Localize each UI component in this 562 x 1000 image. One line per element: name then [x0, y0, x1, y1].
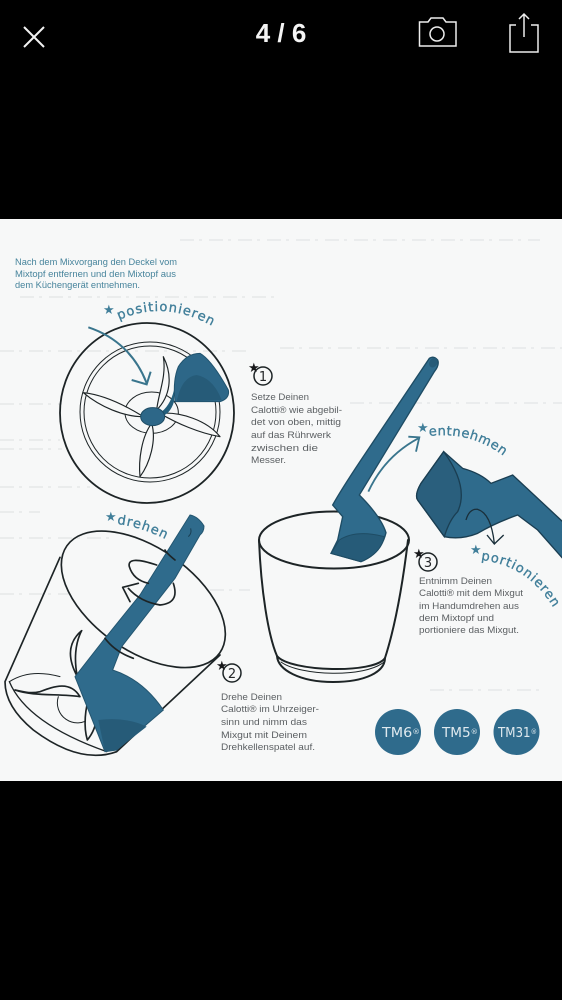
- spatula from above: [141, 353, 229, 426]
- step 2 badge: [216, 659, 241, 682]
- arrow: entnehmen: [368, 437, 419, 492]
- step 1 text: auf das Rührwerk: [251, 430, 331, 441]
- icon: share: [510, 14, 538, 52]
- arrow: drehen rotation: [123, 560, 175, 605]
- step 3 badge: ★: [413, 547, 425, 562]
- label: drehen: [105, 510, 167, 539]
- step 3 badge: [413, 547, 437, 571]
- illustration: step 3 cup with spatula: [259, 356, 562, 682]
- step 1 text: det von oben, mittig: [251, 417, 341, 428]
- badge: TM6: [375, 709, 421, 755]
- step 1 text: Messer.: [251, 455, 286, 466]
- badge: TM6: TM6: [382, 726, 409, 741]
- intro text: [15, 257, 177, 291]
- step 3 text: Calotti® mit dem Mixgut: [419, 588, 523, 599]
- step 1 badge: ★: [248, 361, 260, 376]
- step 2 text: Drehe Deinen: [221, 692, 282, 703]
- step 2 text: Calotti® im Uhrzeiger-: [221, 704, 319, 715]
- badge: TM31: ®: [531, 728, 537, 736]
- label: drehen: ★: [105, 510, 117, 525]
- arrow: positionieren: [88, 327, 151, 384]
- badge: TM5: [434, 709, 480, 755]
- step 1 badge: 1: [259, 370, 267, 385]
- top bar: [0, 0, 562, 219]
- icon: close: [24, 27, 44, 47]
- blades: [15, 631, 97, 740]
- spatula tilted: [75, 515, 204, 752]
- label: entnehmen: ★: [417, 421, 429, 436]
- step 3 text: dem Mixtopf und: [419, 613, 494, 624]
- step 3 text: portioniere das Mixgut.: [419, 625, 519, 636]
- label: portionieren: ★: [470, 543, 482, 558]
- badge: TM5: TM5: [442, 726, 469, 741]
- illustration: step 1 mixing pot from above: [60, 323, 234, 503]
- arrow: portionieren: [466, 509, 504, 544]
- step 2 text: [221, 692, 319, 753]
- label: positionieren: ★: [103, 303, 115, 318]
- label: entnehmen: entnehmen: [429, 426, 506, 456]
- step 1 badge: [248, 361, 272, 385]
- step 3 badge: 3: [424, 556, 432, 571]
- step 1 text: [251, 392, 342, 466]
- badge: TM31: TM31: [498, 726, 534, 741]
- page counter: 4 / 6: [256, 18, 306, 48]
- icon: camera: [420, 18, 456, 46]
- intro text: Mixtopf entfernen und den Mixtopf aus: [15, 269, 176, 280]
- step 2 badge: 2: [228, 667, 236, 682]
- badge: TM5: ®: [471, 728, 478, 736]
- illustration: step 2 tilted mixing pot: [5, 503, 249, 755]
- step 2 text: sinn und nimm das: [221, 717, 307, 728]
- step 1 text: Setze Deinen: [251, 392, 309, 403]
- infographic panel background: [0, 219, 562, 781]
- step 1 text: zwischen die: [251, 443, 318, 454]
- label: positionieren: positionieren: [117, 301, 214, 326]
- intro text: dem Küchengerät entnehmen.: [15, 280, 140, 291]
- step 3 text: [419, 576, 523, 636]
- label: portionieren: portionieren: [482, 552, 558, 607]
- step 3 text: Entnimm Deinen: [419, 576, 492, 587]
- spatula head side view: [417, 452, 562, 558]
- badge: TM6: ®: [412, 728, 420, 736]
- label: drehen: drehen: [118, 514, 167, 539]
- step 1 text: Calotti® wie abgebil-: [251, 405, 342, 416]
- badge: TM31: [494, 709, 540, 755]
- intro text: Nach dem Mixvorgang den Deckel vom: [15, 257, 177, 268]
- step 2 text: Mixgut mit Deinem: [221, 730, 307, 741]
- step 2 text: Drehkellenspatel auf.: [221, 742, 315, 753]
- step 3 text: im Handumdrehen aus: [419, 601, 519, 612]
- spatula in cup: [331, 356, 439, 562]
- step 2 badge: ★: [216, 659, 228, 674]
